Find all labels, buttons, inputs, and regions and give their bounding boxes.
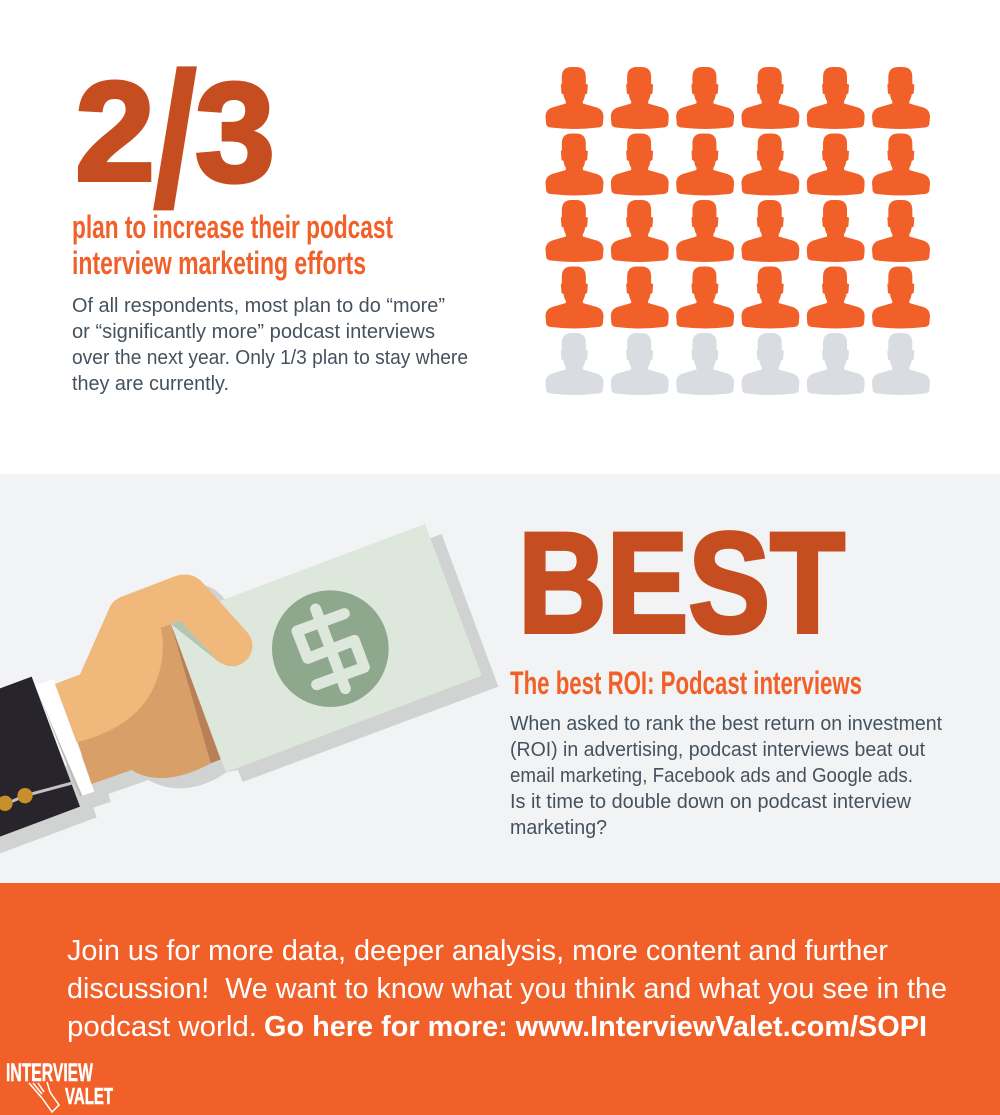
hand palm shade xyxy=(67,624,211,784)
hand dark fold xyxy=(171,624,221,763)
big number 2/3 xyxy=(75,32,275,247)
sleeve shadow xyxy=(40,697,82,797)
footer call to action: Join us for more data, deeper analysis, more content and further xyxy=(67,935,888,967)
logo: Interview Valet: VALET xyxy=(65,1083,113,1109)
grey people xyxy=(546,333,930,395)
body text: email marketing, Facebook ads and Google ads. xyxy=(510,765,913,787)
pictogram: 24 of 30 people highlighted xyxy=(546,67,930,395)
dollar coin xyxy=(272,590,389,707)
shirt cuff xyxy=(35,679,94,796)
body text: over the next year. Only 1/3 plan to stay where xyxy=(72,347,468,369)
heading: plan to increase their podcast xyxy=(72,209,393,245)
button xyxy=(0,796,13,811)
icon: logo hand and tag xyxy=(29,1082,59,1112)
banknote xyxy=(171,524,482,772)
dollar sign xyxy=(297,609,364,689)
note inner shadow xyxy=(171,621,218,662)
big number 2/3: 3 xyxy=(195,53,275,211)
panel: best ROI xyxy=(510,504,942,839)
body text: Is it time to double down on podcast interview xyxy=(510,791,912,813)
footer call to action: discussion! We want to know what you think and what you see in the xyxy=(67,973,947,1005)
orange people xyxy=(546,67,930,328)
body text xyxy=(72,295,468,395)
big number 2/3: 2 xyxy=(75,52,155,210)
jacket sleeve xyxy=(0,677,80,837)
body text: they are currently. xyxy=(72,373,229,395)
hand xyxy=(55,575,252,742)
body text: (ROI) in advertising, podcast interviews beat out xyxy=(510,739,925,761)
sleeve slit xyxy=(0,783,73,807)
illustration: hand holding money xyxy=(0,524,498,853)
body text: marketing? xyxy=(510,817,607,839)
footer call to action: Go here for more: www.InterviewValet.com/SOPI xyxy=(264,1011,927,1043)
heading: interview marketing efforts xyxy=(72,245,366,281)
panel: two thirds statistic xyxy=(72,32,468,395)
footer call to action: podcast world. xyxy=(67,1011,257,1043)
shadow xyxy=(0,534,498,853)
button xyxy=(17,788,33,803)
body text xyxy=(510,713,942,839)
body text: or “significantly more” podcast interviews xyxy=(72,321,435,343)
big word BEST: BEST xyxy=(518,504,845,663)
body text: When asked to rank the best return on investment xyxy=(510,713,942,735)
logo: Interview Valet: INTERVIEW xyxy=(6,1059,93,1087)
body text: Of all respondents, most plan to do “more” xyxy=(72,295,445,317)
big number 2/3: / xyxy=(152,32,198,247)
heading xyxy=(72,209,393,281)
footer call to action xyxy=(67,935,947,1043)
logo: Interview Valet xyxy=(6,1059,113,1112)
